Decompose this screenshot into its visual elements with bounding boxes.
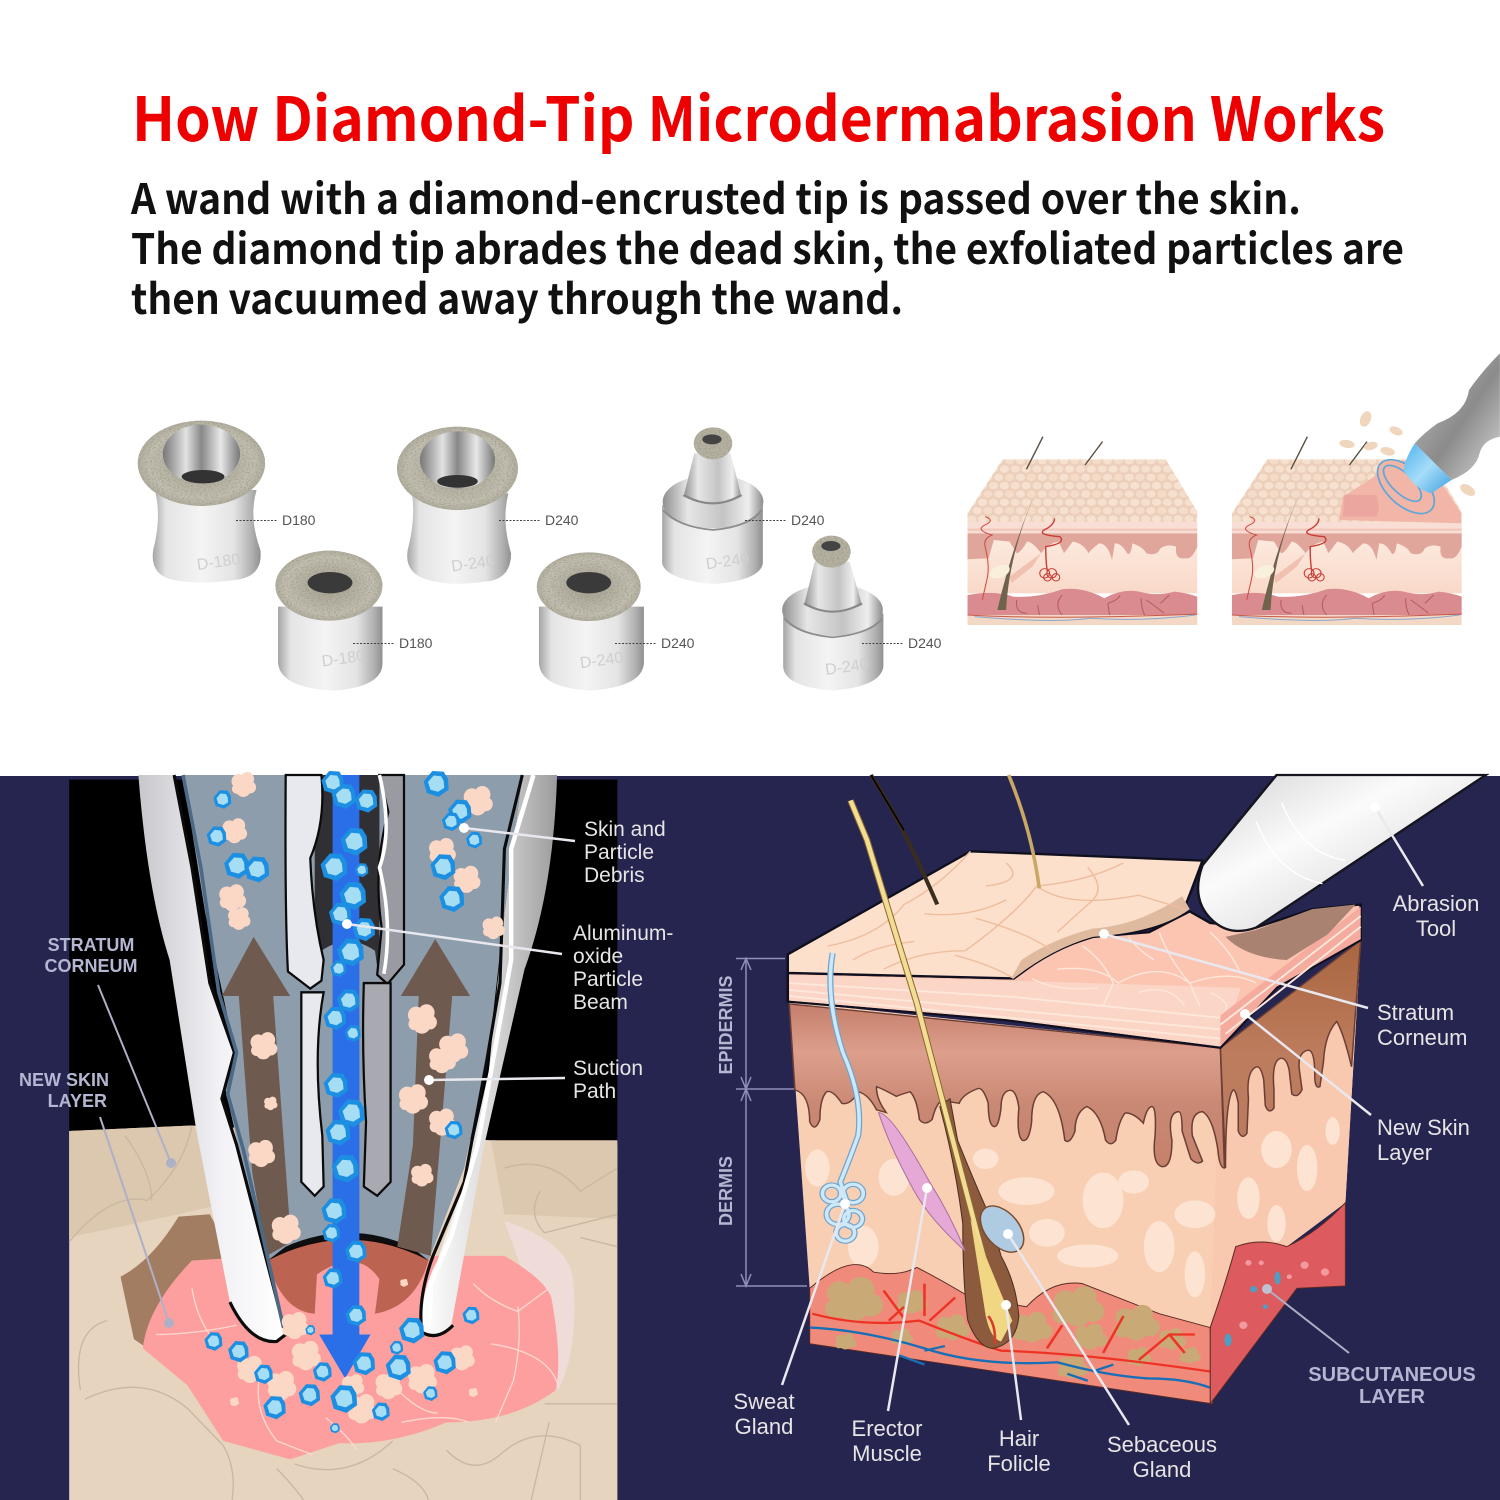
skin debris xyxy=(219,772,505,1424)
label: suction path: Path xyxy=(573,1080,616,1103)
tool wall right xyxy=(422,775,557,1336)
title: How Diamond-Tip Microdermabrasion Works xyxy=(132,70,1385,159)
tip: D240 pointed xyxy=(662,427,763,584)
measurement brackets xyxy=(736,958,807,1286)
label: skin and particle debris: Skin and xyxy=(584,818,666,841)
muscle xyxy=(879,1113,965,1251)
top skin surface xyxy=(788,851,1203,978)
hairs xyxy=(851,775,1039,1344)
suction arrow right xyxy=(397,939,470,1256)
stratum corneum exposed xyxy=(788,904,1361,1048)
label: new skin layer: New Skin xyxy=(1377,1115,1470,1140)
skin cell pattern xyxy=(1032,932,1256,1011)
suction arrow left xyxy=(222,937,291,1256)
label: stratum corneum: Stratum xyxy=(1377,1000,1454,1025)
fat cells xyxy=(825,1277,1201,1378)
black backdrop xyxy=(69,780,617,1150)
label: subcutaneous layer: LAYER xyxy=(1359,1386,1426,1408)
label: aluminum oxide particle beam: Beam xyxy=(573,991,628,1014)
tip: D180 flat xyxy=(275,551,382,691)
shadow under tool xyxy=(1226,904,1356,960)
label: erector muscle: Erector xyxy=(852,1416,922,1441)
tip labels: D180 xyxy=(399,635,433,651)
description text xyxy=(130,166,1404,327)
tip labels: D180 xyxy=(282,512,316,528)
panel: skin block cross-section xyxy=(716,775,1486,1482)
subcutaneous front xyxy=(810,1265,1213,1404)
front layer band xyxy=(789,975,1241,1046)
tip: D240 large concave: D-240 xyxy=(450,553,496,576)
tip: D180 flat: D-180 xyxy=(321,648,366,671)
label: hair follicle: Hair xyxy=(999,1426,1039,1451)
label: sebaceous gland: Sebaceous xyxy=(1107,1432,1217,1457)
tip labels: D240 xyxy=(545,512,579,528)
tip labels: D240 xyxy=(791,512,825,528)
tip: D180 large concave xyxy=(138,421,265,582)
sweat gland xyxy=(822,953,863,1241)
label: aluminum oxide particle beam: oxide xyxy=(573,945,623,968)
panel: abrasion tool cross-section xyxy=(19,771,673,1500)
area under chamber xyxy=(268,1238,429,1314)
description text: then vacuumed away through the wand. xyxy=(131,266,903,327)
particle beam xyxy=(319,775,371,1378)
description text: The diamond tip abrades the dead skin, the exfoliated particles are xyxy=(131,216,1404,277)
label: new skin layer: NEW SKIN xyxy=(19,1070,109,1090)
subcutaneous side xyxy=(1210,1203,1345,1404)
blood vessels xyxy=(812,1284,1210,1371)
tip: D240 pointed: D-240 xyxy=(705,550,750,573)
label: sweat gland: Gland xyxy=(735,1414,793,1439)
tip: D240 pointed small: D-240 xyxy=(824,656,870,679)
sebaceous gland xyxy=(971,1199,1033,1259)
panel: before and after skin illustrations xyxy=(968,353,1500,625)
dermis highlights xyxy=(805,1117,1340,1298)
tool wall left xyxy=(138,775,286,1342)
panel: diamond tips xyxy=(138,421,942,691)
illustration: untreated skin xyxy=(968,437,1197,625)
label: epidermis: EPIDERMIS xyxy=(716,975,736,1075)
side layer band xyxy=(1220,907,1361,1046)
label: stratum corneum: STRATUM xyxy=(48,935,134,955)
label: suction path: Suction xyxy=(573,1057,643,1080)
layered bands xyxy=(789,916,1361,1039)
callout lines right panel xyxy=(782,802,1423,1425)
tip: D240 flat xyxy=(537,552,644,691)
tip: D240 large concave xyxy=(397,427,518,584)
label: skin and particle debris: Particle xyxy=(584,841,654,864)
suction chamber xyxy=(183,775,522,1261)
label: stratum corneum: Corneum xyxy=(1377,1025,1467,1050)
label: aluminum oxide particle beam: Particle xyxy=(573,968,643,991)
tip: D180 large concave: D-180 xyxy=(196,551,241,574)
label: subcutaneous layer: SUBCUTANEOUS xyxy=(1308,1364,1476,1386)
label: skin and particle debris: Debris xyxy=(584,864,645,887)
inner tube xyxy=(285,775,404,1196)
aluminum oxide particles xyxy=(204,771,482,1433)
label: stratum corneum: CORNEUM xyxy=(44,956,138,976)
skin surface xyxy=(69,1125,617,1500)
tip: D240 flat: D-240 xyxy=(579,649,625,672)
illustration: skin under wand xyxy=(1232,353,1500,625)
panel: navy background xyxy=(0,776,1500,1500)
label: new skin layer: LAYER xyxy=(48,1091,107,1111)
label: erector muscle: Muscle xyxy=(852,1441,922,1466)
follicle xyxy=(940,1099,1019,1348)
exposed layer xyxy=(121,1214,574,1459)
label: hair follicle: Folicle xyxy=(987,1451,1051,1476)
dermis side tint xyxy=(1210,944,1361,1330)
label: sebaceous gland: Gland xyxy=(1133,1457,1191,1482)
label: abrasion tool: Tool xyxy=(1416,916,1456,941)
label: new skin layer: Layer xyxy=(1377,1140,1432,1165)
label: dermis: DERMIS xyxy=(716,1156,736,1226)
epidermis side xyxy=(1220,940,1361,1168)
label: abrasion tool: Abrasion xyxy=(1393,891,1479,916)
callout lines left panel xyxy=(98,823,575,1328)
tip labels xyxy=(236,512,942,651)
tip labels: D240 xyxy=(908,635,942,651)
description text: A wand with a diamond-encrusted tip is passed over the skin. xyxy=(130,166,1301,227)
tip: D240 pointed small xyxy=(782,536,883,691)
tool xyxy=(1198,775,1486,931)
epidermis front xyxy=(789,1004,1224,1168)
skin dermis xyxy=(789,944,1361,1330)
tip labels: D240 xyxy=(661,635,695,651)
label: aluminum oxide particle beam: Aluminum- xyxy=(573,922,673,945)
label: sweat gland: Sweat xyxy=(733,1389,795,1414)
